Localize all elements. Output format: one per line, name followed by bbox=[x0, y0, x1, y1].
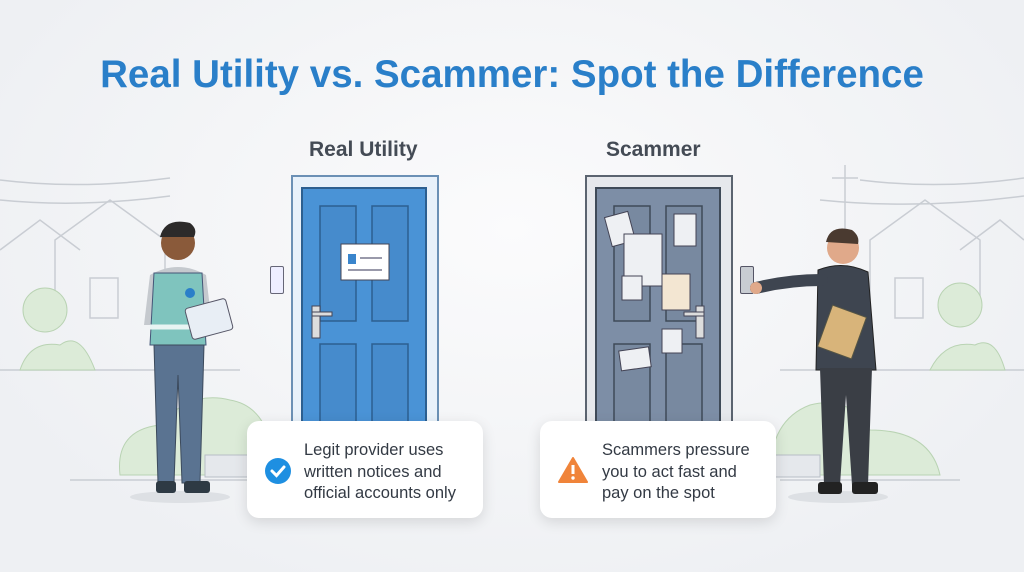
callout: scammer bbox=[540, 421, 776, 518]
callout: real utility: Legit provider uses bbox=[304, 441, 443, 459]
person: scammer bbox=[750, 228, 888, 503]
callout: real utility: written notices and bbox=[304, 462, 442, 480]
person: utility worker bbox=[130, 222, 234, 503]
icon: doorbell left bbox=[270, 266, 284, 294]
callout: real utility: official accounts only bbox=[304, 484, 456, 502]
callout: scammer: Scammers pressure bbox=[602, 441, 750, 459]
icon: doorbell right bbox=[740, 266, 754, 294]
door: scammer bbox=[585, 175, 733, 421]
label: real utility: Real Utility bbox=[309, 138, 418, 161]
icon: check bbox=[265, 458, 291, 484]
callout: real utility bbox=[247, 421, 483, 518]
label: scammer: Scammer bbox=[606, 138, 701, 161]
callout: scammer: pay on the spot bbox=[602, 484, 715, 502]
door: real utility bbox=[291, 175, 439, 421]
icon: warning bbox=[558, 457, 588, 483]
title: Real Utility vs. Scammer: Spot the Difference bbox=[100, 53, 924, 96]
callout: scammer: you to act fast and bbox=[602, 462, 737, 480]
